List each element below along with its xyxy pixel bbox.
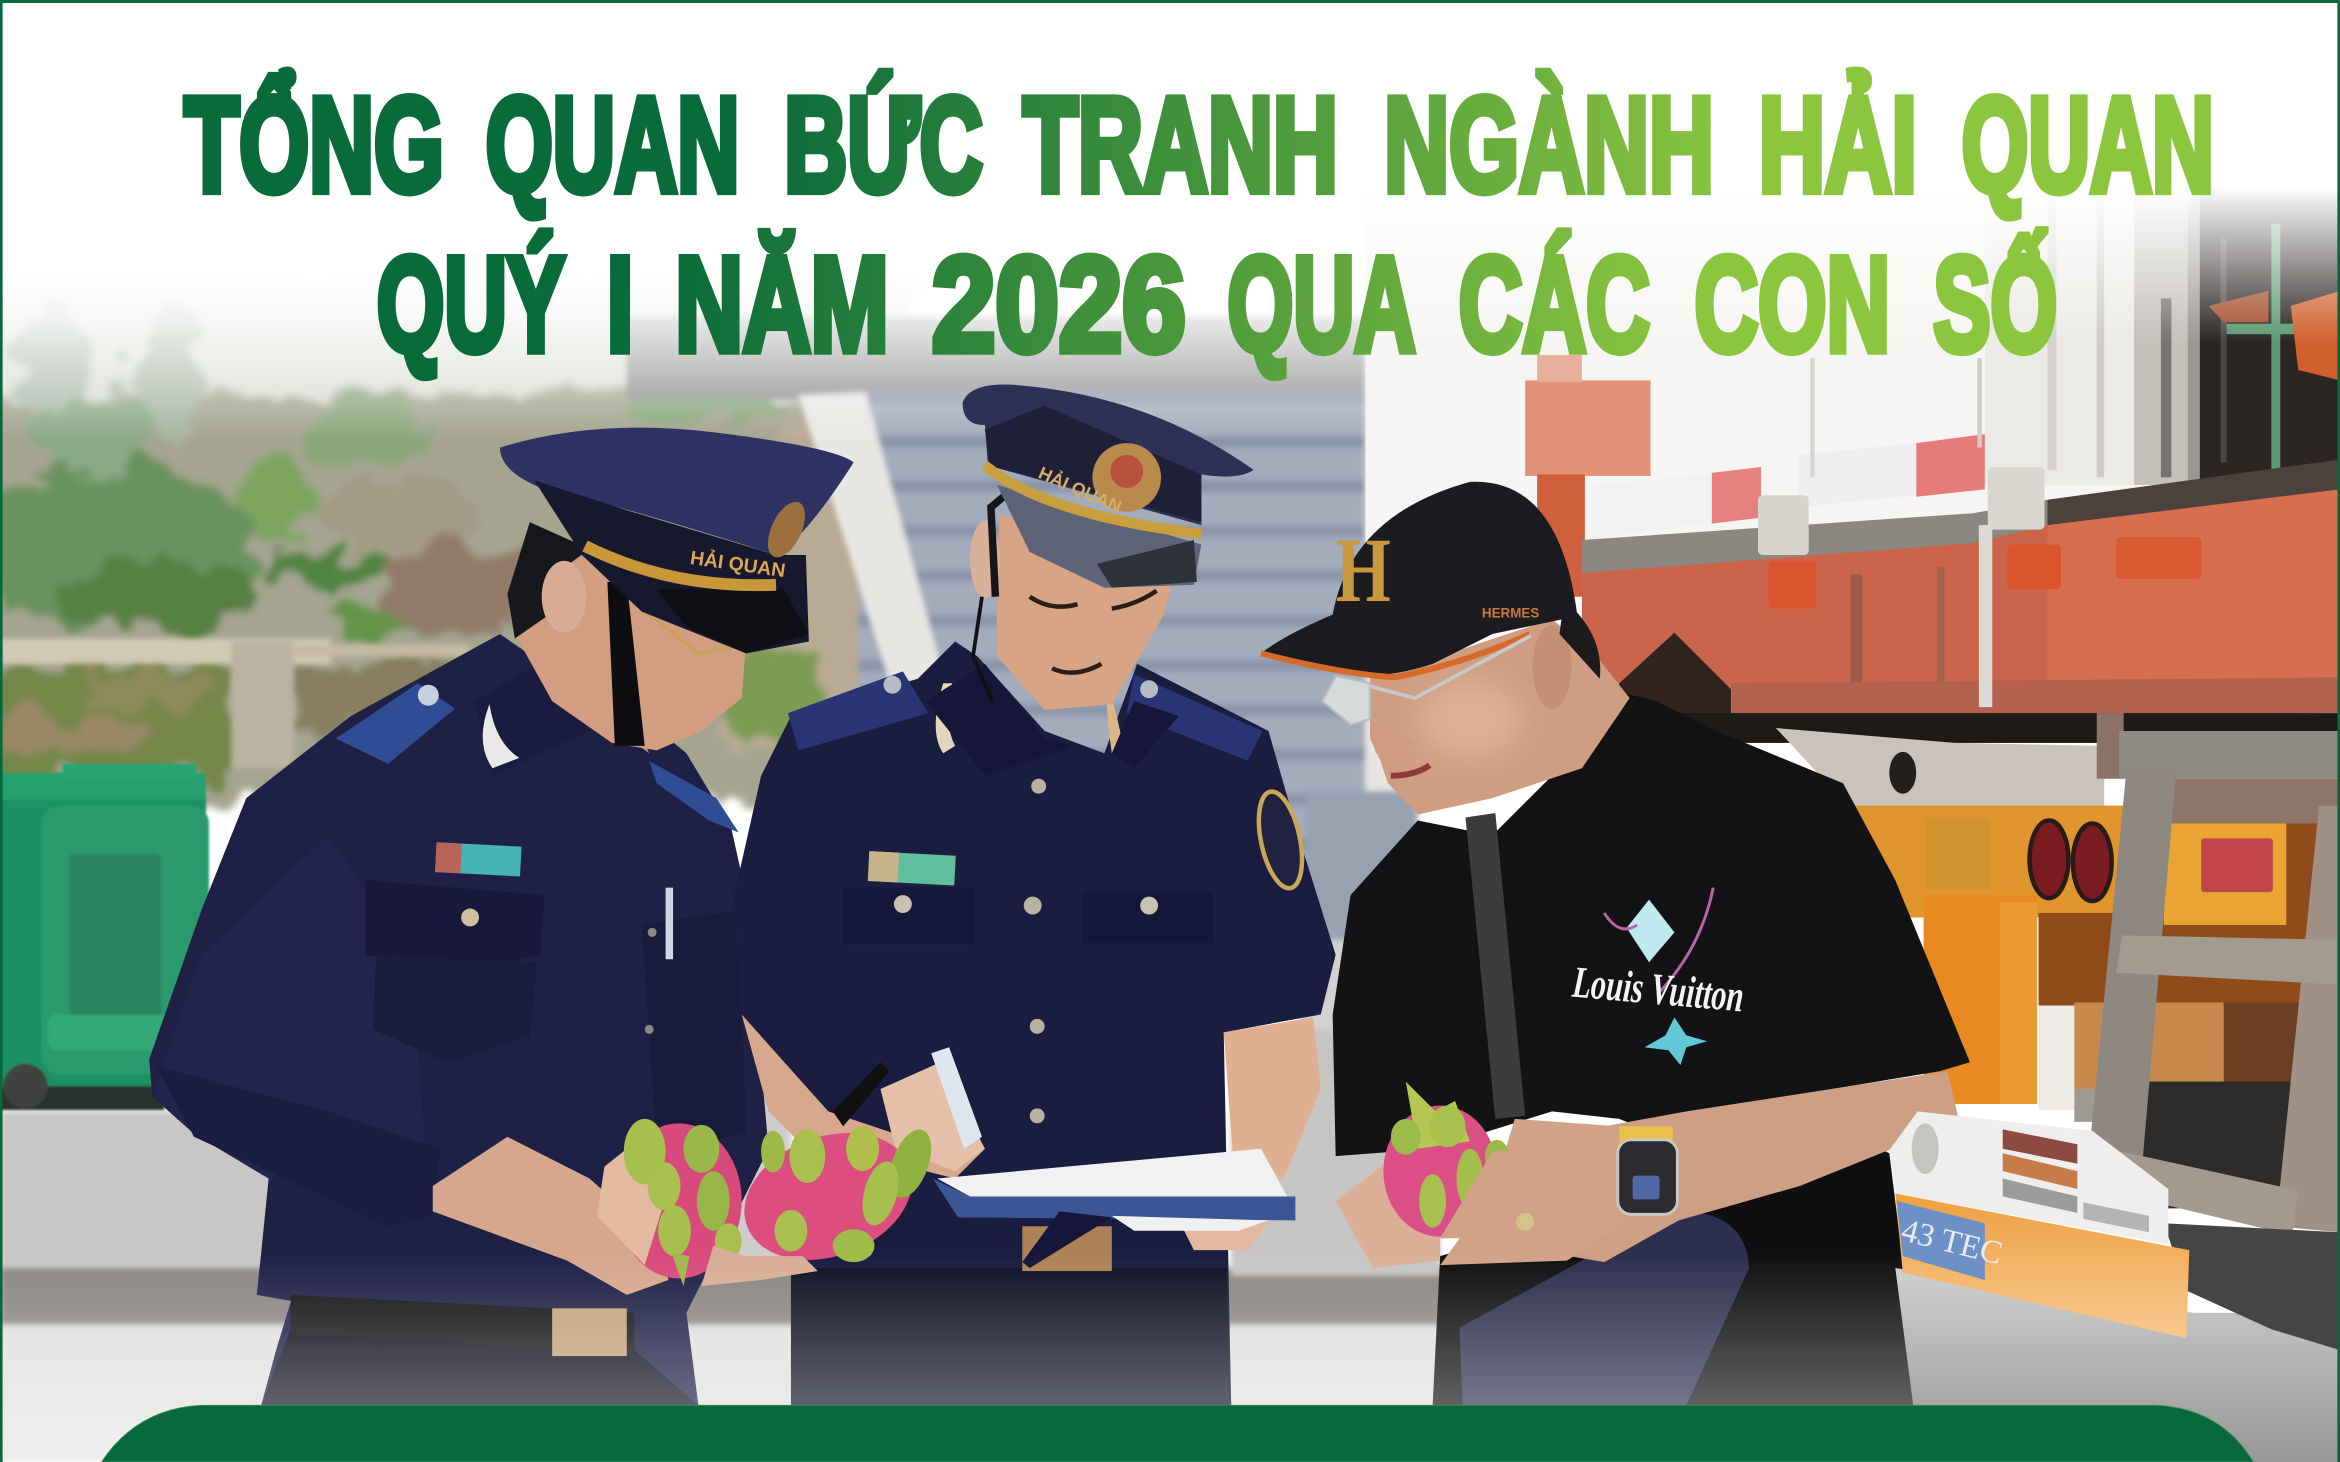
icon: dragon fruit in left officer's hands — [597, 1119, 742, 1286]
person: centre customs officer: HẢI QUAN — [1036, 462, 1125, 517]
title: heading line 2: CÁC — [1459, 230, 1650, 380]
icon: dragon fruit in man's hands — [1383, 1082, 1537, 1238]
title: heading line 2: CON — [1695, 230, 1890, 380]
icon: dragon fruit at centre — [701, 1111, 939, 1286]
background: orange rear bar with number plate — [1895, 1193, 2189, 1338]
person: man in black cap and T-shirt — [1261, 482, 1970, 1405]
person: left customs officer: HẢI QUAN — [689, 546, 787, 582]
title: heading line 2: QUA — [1227, 230, 1415, 380]
icon: green waste bin — [0, 764, 209, 1110]
title: heading line 2 — [377, 230, 2057, 380]
person: man in black cap and T-shirt: H — [1336, 520, 1391, 622]
background: bumper with lights — [1889, 1111, 2168, 1244]
top white fade left — [0, 269, 1365, 440]
bottom light haze over the photo — [0, 1253, 2340, 1462]
background: road under the trailer — [1895, 1268, 2340, 1462]
background: orange rear bar with number plate: 43 TEC — [1898, 1213, 2006, 1272]
background: rust red truck beam — [1525, 355, 2340, 743]
title: heading line 1: NGÀNH — [1384, 70, 1714, 220]
title: heading line 1: HẢI — [1759, 70, 1917, 220]
white sky left — [0, 0, 1365, 270]
top white fade right — [1365, 186, 2340, 343]
title: heading line 2: QUÝ — [377, 230, 565, 380]
title: heading line 1: TRANH — [1023, 70, 1338, 220]
background: hillside — [0, 269, 943, 806]
title: heading line 1: TỔNG — [184, 70, 444, 220]
panel: green content panel top — [101, 1405, 2253, 1462]
title: heading line 2: 2026 — [932, 230, 1186, 380]
person: centre customs officer — [734, 385, 1336, 1405]
background: white truck container — [1365, 186, 2340, 545]
title: heading line 2: SỐ — [1933, 230, 2057, 380]
person: man in black cap and T-shirt: HERMES — [1482, 606, 1539, 621]
background: low stone wall — [0, 639, 470, 768]
background: dark shadow beside bumper — [2164, 1223, 2340, 1350]
background: pavement and road — [0, 1029, 1940, 1462]
title: heading line 1 — [184, 70, 2214, 220]
background: rear ladder frame — [2086, 713, 2340, 1235]
white sky right — [1365, 0, 2340, 188]
person: man in black cap and T-shirt: Louis Vuitton — [1570, 957, 1746, 1021]
title: heading line 1: QUAN — [486, 70, 739, 220]
background: orange trailer chassis and lights — [1776, 728, 2340, 1208]
title: heading line 2: I — [607, 230, 634, 380]
title: heading line 2: NĂM — [675, 230, 889, 380]
background: building and stairs — [627, 316, 1418, 1283]
person: left customs officer — [149, 428, 854, 1405]
title: heading line 1: BỨC — [784, 70, 983, 220]
